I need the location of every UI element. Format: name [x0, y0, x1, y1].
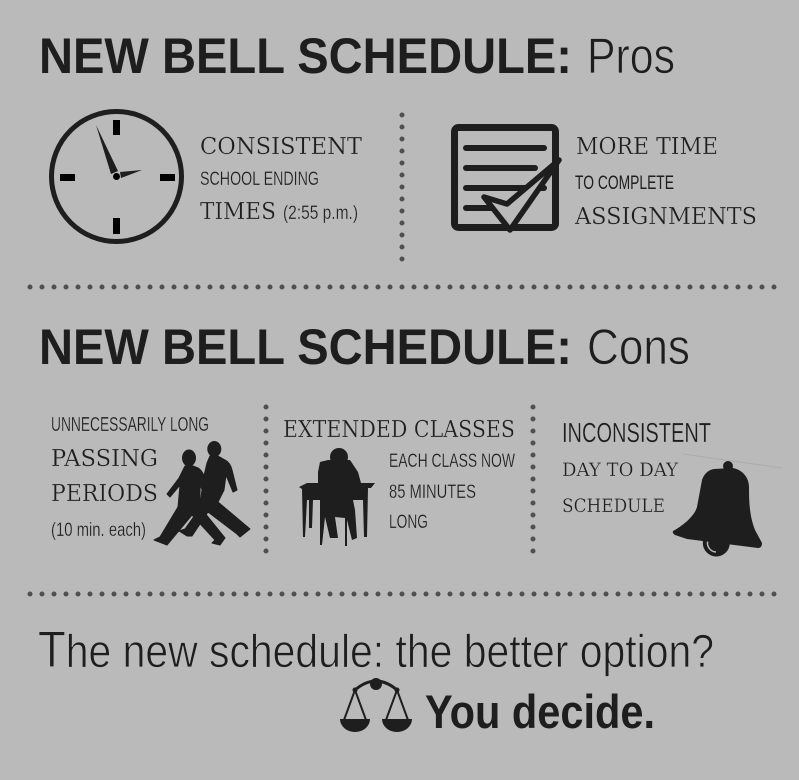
- text: consistent school ending times: (2:55 p.m.): [283, 203, 358, 224]
- icon: walking people: [154, 442, 250, 545]
- text: consistent school ending times: [200, 134, 363, 225]
- text: unnecessarily long passing periods: PERIODS: [51, 481, 158, 507]
- text: extended classes: LONG: [389, 512, 428, 533]
- icon: person at desk: [299, 448, 375, 546]
- text: more time to complete assignments: MORE TIME: [576, 134, 718, 160]
- text: inconsistent day to day schedule: [562, 417, 711, 517]
- icon: assignment checklist: [454, 128, 559, 230]
- text: inconsistent day to day schedule: DAY TO DAY: [562, 459, 678, 481]
- icon: bell: [673, 454, 782, 556]
- text: consistent school ending times: CONSISTENT: [200, 134, 363, 160]
- text: unnecessarily long passing periods: PASSING: [51, 446, 158, 472]
- text: extended classes: 85 MINUTES: [389, 482, 476, 503]
- text: extended classes: EXTENDED CLASSES: [283, 417, 515, 443]
- text: consistent school ending times: SCHOOL ENDING: [200, 169, 319, 190]
- icon: scales: [340, 678, 412, 732]
- text: consistent school ending times: TIMES: [200, 199, 276, 225]
- heading: pros: Pros: [587, 28, 675, 84]
- text: unnecessarily long passing periods: (10 min. each): [51, 520, 146, 541]
- text: unnecessarily long passing periods: UNNECESSARILY LONG: [51, 414, 209, 436]
- text: extended classes: [283, 417, 515, 533]
- text: more time to complete assignments: ASSIGNMENTS: [574, 204, 757, 230]
- icon: clock: [52, 112, 182, 242]
- text: inconsistent day to day schedule: INCONSISTENT: [562, 417, 711, 448]
- text: extended classes: EACH CLASS NOW: [389, 451, 515, 472]
- text: inconsistent day to day schedule: SCHEDULE: [562, 495, 665, 517]
- text: you decide: You decide.: [425, 685, 655, 738]
- text: closing question: The new schedule: the better option?: [38, 621, 714, 678]
- heading: cons: NEW BELL SCHEDULE:: [39, 319, 572, 375]
- heading: pros: NEW BELL SCHEDULE:: [39, 28, 572, 84]
- text: unnecessarily long passing periods: [51, 414, 209, 541]
- heading: cons: Cons: [587, 319, 690, 375]
- text: more time to complete assignments: TO COMPLETE: [575, 173, 674, 194]
- text: more time to complete assignments: [574, 134, 757, 230]
